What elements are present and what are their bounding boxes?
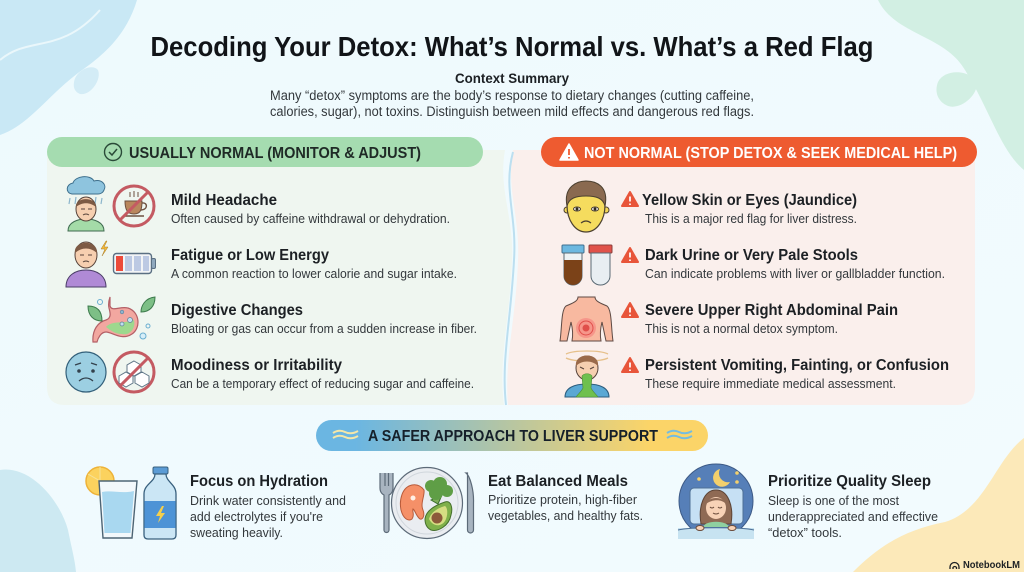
text: fatigue xyxy=(171,247,457,281)
icon: torso with pain xyxy=(560,297,613,341)
text: balanced meals: Eat Balanced Meals xyxy=(488,473,628,490)
heading: not normal xyxy=(541,137,977,167)
text: fatigue: Fatigue or Low Energy xyxy=(171,247,329,264)
icon: vomiting person xyxy=(565,351,609,397)
item: vomiting xyxy=(565,351,949,397)
text: mild headache: Mild Headache xyxy=(171,192,277,209)
text: hydration xyxy=(190,473,346,540)
icon: stomach with leaves and bubbles xyxy=(88,297,155,342)
item: jaundice xyxy=(564,181,857,232)
text: hydration: Drink water consistently and xyxy=(190,493,346,508)
text: balanced meals: vegetables, and healthy fats. xyxy=(488,508,643,523)
panel: usually normal xyxy=(47,137,512,405)
context summary: calories, sugar), not toxins. Distinguish between mild effects and dangerous red flags. xyxy=(270,104,754,119)
item: digestive changes xyxy=(88,297,477,342)
title: Decoding Your Detox: What’s Normal vs. What’s a Red Flag xyxy=(150,31,874,62)
text: balanced meals xyxy=(488,473,643,523)
text: abdominal pain: This is not a normal detox symptom. xyxy=(645,322,838,336)
text: moodiness xyxy=(171,357,474,391)
icon: sleeping person xyxy=(678,464,754,539)
text: digestive changes: Digestive Changes xyxy=(171,302,303,319)
item: abdominal pain xyxy=(560,297,898,341)
icon: warning xyxy=(622,358,638,372)
text: vomiting xyxy=(645,357,949,391)
item: dark urine xyxy=(562,245,945,285)
text: jaundice: Yellow Skin or Eyes (Jaundice) xyxy=(642,192,857,209)
icon: sad face xyxy=(66,352,106,392)
context summary: Context Summary xyxy=(455,71,569,86)
text: vomiting: These require immediate medical assessment. xyxy=(645,377,896,391)
heading: usually normal xyxy=(47,137,483,167)
heading: a safer approach: A SAFER APPROACH TO LIVER SUPPORT xyxy=(368,428,658,445)
text: moodiness: Moodiness or Irritability xyxy=(171,357,342,374)
text: jaundice xyxy=(642,192,857,226)
icon: warning xyxy=(622,192,638,206)
item: fatigue xyxy=(66,241,457,287)
text: quality sleep: “detox” tools. xyxy=(768,525,842,540)
text: vomiting: Persistent Vomiting, Fainting, or Confusion xyxy=(645,357,949,374)
text: quality sleep: Sleep is one of the most xyxy=(768,493,899,508)
icon: no caffeine xyxy=(114,186,154,226)
text: balanced meals: Prioritize protein, high-fiber xyxy=(488,492,638,507)
context summary: Many “detox” symptoms are the body’s response to dietary changes (cutting caffeine, xyxy=(270,88,754,103)
icon: warning xyxy=(622,303,638,317)
text: abdominal pain: Severe Upper Right Abdominal Pain xyxy=(645,302,898,319)
context summary xyxy=(270,71,754,119)
text: quality sleep xyxy=(768,473,938,540)
tip: quality sleep xyxy=(678,464,938,540)
text: hydration: sweating heavily. xyxy=(190,525,283,540)
icon: sample tubes xyxy=(562,245,612,285)
heading: not normal: NOT NORMAL (STOP DETOX & SEEK MEDICAL HELP) xyxy=(584,145,957,162)
tip: balanced meals xyxy=(380,468,643,538)
icon: no sugar xyxy=(114,352,154,392)
text: moodiness: Can be a temporary effect of reducing sugar and caffeine. xyxy=(171,377,474,391)
text: jaundice: This is a major red flag for liver distress. xyxy=(645,212,857,226)
item: moodiness xyxy=(66,352,474,392)
panel: not normal xyxy=(507,137,977,405)
icon: water glass and bottle xyxy=(86,467,176,539)
text: mild headache xyxy=(171,192,450,226)
text: mild headache: Often caused by caffeine withdrawal or dehydration. xyxy=(171,212,450,226)
icon: low battery xyxy=(114,254,156,274)
icon: rain cloud over head xyxy=(67,177,105,231)
text: dark urine xyxy=(645,247,945,281)
text: abdominal pain xyxy=(645,302,898,336)
text: digestive changes xyxy=(171,302,477,336)
tip: hydration xyxy=(86,467,346,540)
heading: usually normal: USUALLY NORMAL (MONITOR & ADJUST) xyxy=(129,145,421,162)
icon: yellow face xyxy=(564,181,609,232)
text: digestive changes: Bloating or gas can occur from a sudden increase in fiber. xyxy=(171,322,477,336)
text: fatigue: A common reaction to lower calorie and sugar intake. xyxy=(171,267,457,281)
text: hydration: add electrolytes if you're xyxy=(190,509,323,524)
text: hydration: Focus on Hydration xyxy=(190,473,328,490)
text: quality sleep: underappreciated and effective xyxy=(768,509,938,524)
heading: a safer approach xyxy=(316,420,708,451)
text: dark urine: Dark Urine or Very Pale Stools xyxy=(645,247,858,264)
item: mild headache xyxy=(67,177,450,231)
icon: tired person xyxy=(66,241,108,287)
text: dark urine: Can indicate problems with liver or gallbladder function. xyxy=(645,267,945,281)
icon: warning xyxy=(622,248,638,262)
text: quality sleep: Prioritize Quality Sleep xyxy=(768,473,931,490)
icon: plate with salmon, broccoli, avocado xyxy=(380,468,474,538)
